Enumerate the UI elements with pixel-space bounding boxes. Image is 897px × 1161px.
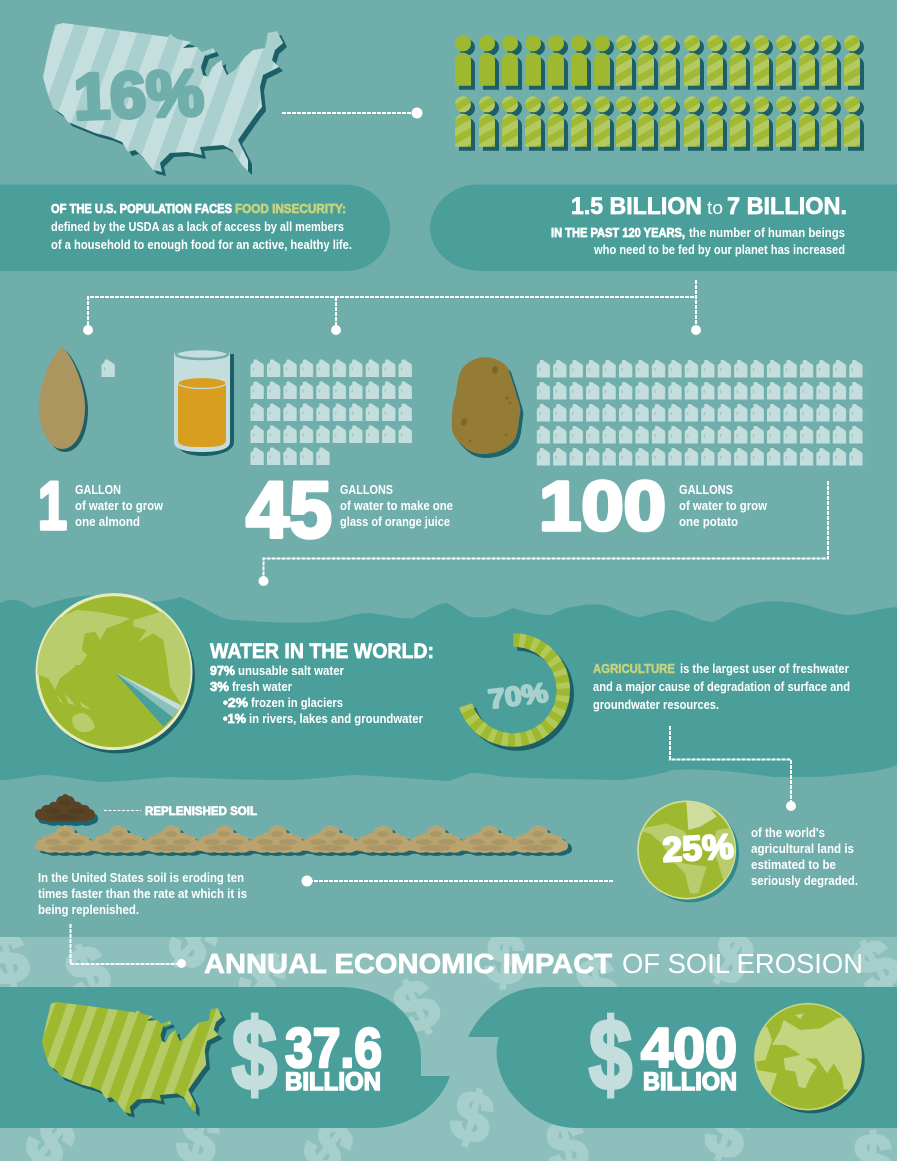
stat: 45 gallons: glass of orange juice — [340, 515, 450, 529]
text: degraded land: estimated to be — [751, 858, 836, 872]
background dollar signs: $ — [56, 929, 119, 1015]
stat: 1 gallon: one almond — [75, 515, 140, 529]
stat: 37.6 billion: BILLION — [285, 1068, 381, 1096]
background dollar signs: $ — [382, 963, 451, 1050]
connector: gallons to water section — [258, 481, 828, 586]
text: population growth: who need to be fed by our planet has increased — [593, 243, 845, 257]
icon: potato — [452, 357, 523, 458]
text: water in the world: frozen in glaciers — [251, 696, 343, 710]
text: agriculture — [593, 662, 850, 712]
text: population growth: the number of human beings — [689, 226, 845, 240]
text: food insecurity definition — [51, 202, 352, 252]
text: water in the world: •1% — [223, 712, 246, 726]
chart: water pie globe — [36, 593, 195, 754]
stat: 45 gallons — [246, 465, 453, 554]
stat: 400 billion: 400 — [641, 1016, 737, 1079]
icon grid: 45 water jugs — [250, 359, 414, 469]
text: agriculture: groundwater resources. — [593, 698, 719, 712]
text: degraded land: agricultural land is — [751, 842, 854, 856]
text: population growth: 7 BILLION. — [727, 193, 847, 220]
stat: 100 gallons: of water to grow — [679, 499, 767, 513]
stat: 45 gallons: 45 — [246, 465, 332, 554]
background dollar signs: $ — [226, 936, 299, 1023]
text: water in the world: •2% — [223, 696, 248, 710]
text: water in the world: in rivers, lakes and groundwater — [249, 712, 423, 726]
stat: 400 billion: $ — [589, 999, 632, 1111]
text: degraded land: of the world's — [751, 826, 825, 840]
icon: globe world — [747, 1004, 870, 1113]
text: food insecurity definition: FOOD INSECURITY: — [235, 202, 346, 216]
stat: 1 gallon: of water to grow — [75, 499, 163, 513]
25 percent figure: 25% — [661, 827, 735, 870]
economic impact band — [0, 937, 897, 1161]
stat: 45 gallons: GALLONS — [340, 483, 393, 497]
panel: world economic cost pill — [468, 987, 897, 1128]
text: soil erosion rate: being replenished. — [38, 903, 139, 917]
heading: annual economic impact of soil erosion — [204, 948, 863, 979]
text: soil erosion rate — [38, 871, 247, 917]
background dollar signs: $ — [482, 918, 528, 1000]
connector: agriculture to degraded land — [670, 726, 796, 811]
stat: 400 billion: BILLION — [643, 1068, 737, 1096]
icon: replenished soil pile — [35, 794, 98, 826]
stat: 1 gallon: GALLON — [75, 483, 121, 497]
stat: 45 gallons: of water to make one — [340, 499, 453, 513]
text: population growth — [551, 193, 847, 257]
text: agriculture: AGRICULTURE — [593, 662, 675, 676]
connector: water footprint tree — [83, 280, 701, 335]
text: agriculture: is the largest user of freshwater — [680, 662, 849, 676]
icon: globe 25 percent — [633, 797, 740, 902]
stat: 400 billion — [589, 999, 737, 1111]
text: soil erosion rate: In the United States soil is eroding ten — [38, 871, 244, 885]
70 percent figure: 70% — [487, 677, 550, 715]
text: food insecurity definition: OF THE U.S. POPULATION FACES — [51, 202, 232, 216]
text: population growth: to — [707, 198, 723, 218]
panel: U.S. economic cost pill — [0, 987, 450, 1128]
icon: glass of orange juice — [174, 349, 234, 456]
icon: almond — [39, 347, 88, 452]
stat: 37.6 billion: 37.6 — [285, 1016, 382, 1079]
text: soil erosion rate: times faster than the rate at which it is — [38, 887, 247, 901]
panel: population pill — [430, 184, 897, 271]
text: agriculture: and a major cause of degradation of surface and — [593, 680, 850, 694]
text: water in the world: 3% — [210, 680, 229, 694]
text: water in the world: 97% — [210, 664, 235, 678]
icon: U.S. map green — [42, 1002, 226, 1118]
water band background — [0, 595, 897, 782]
stat: 100 gallons: GALLONS — [679, 483, 733, 497]
16 percent figure: 16% — [73, 56, 205, 133]
text: food insecurity definition: of a household to enough food for an active, healthy life. — [51, 238, 352, 252]
stat: 37.6 billion: $ — [232, 999, 277, 1111]
background dollar signs: $ — [571, 942, 623, 1026]
background dollar signs: $ — [443, 1074, 501, 1160]
heading: annual economic impact of soil erosion: ANNUAL ECONOMIC IMPACT — [204, 948, 612, 979]
connector: degraded land to soil — [302, 876, 613, 886]
chart: 70 percent ring — [466, 640, 567, 744]
background dollar signs — [0, 900, 897, 1161]
heading: annual economic impact of soil erosion: OF SOIL EROSION — [622, 948, 863, 979]
stat: 100 gallons: 100 — [539, 467, 666, 545]
text: food insecurity definition: defined by the USDA as a lack of access by all members — [51, 220, 344, 234]
text: population growth: 1.5 BILLION — [571, 193, 702, 220]
text: population growth: IN THE PAST 120 YEARS, — [551, 226, 685, 240]
stat: 100 gallons: one potato — [679, 515, 738, 529]
text: water in the world: unusable salt water — [238, 664, 344, 678]
stat: 100 gallons — [539, 467, 767, 545]
icon: U.S. map 16 percent — [43, 23, 287, 176]
stat: 1 gallon: 1 — [38, 468, 67, 544]
icon grid: 100 water jugs — [537, 360, 866, 470]
icon: eroded soil piles — [35, 825, 572, 856]
stat: 1 gallon — [38, 468, 163, 544]
stat: 37.6 billion — [232, 999, 382, 1111]
background dollar signs: $ — [694, 914, 767, 1001]
background dollar signs: $ — [154, 900, 234, 985]
panel: food insecurity pill — [0, 184, 390, 271]
text: water in the world: WATER IN THE WORLD: — [210, 640, 434, 663]
text: water in the world — [210, 640, 434, 726]
icon grid: people — [455, 35, 864, 151]
icon: single water jug — [102, 359, 116, 378]
text: degraded land — [751, 826, 858, 888]
text: degraded land: seriously degraded. — [751, 874, 858, 888]
connector: soil text to economic impact — [70, 924, 186, 968]
text: water in the world: fresh water — [232, 680, 292, 694]
connector: map to people — [282, 108, 422, 118]
label: replenished soil: REPLENISHED SOIL — [145, 804, 257, 818]
